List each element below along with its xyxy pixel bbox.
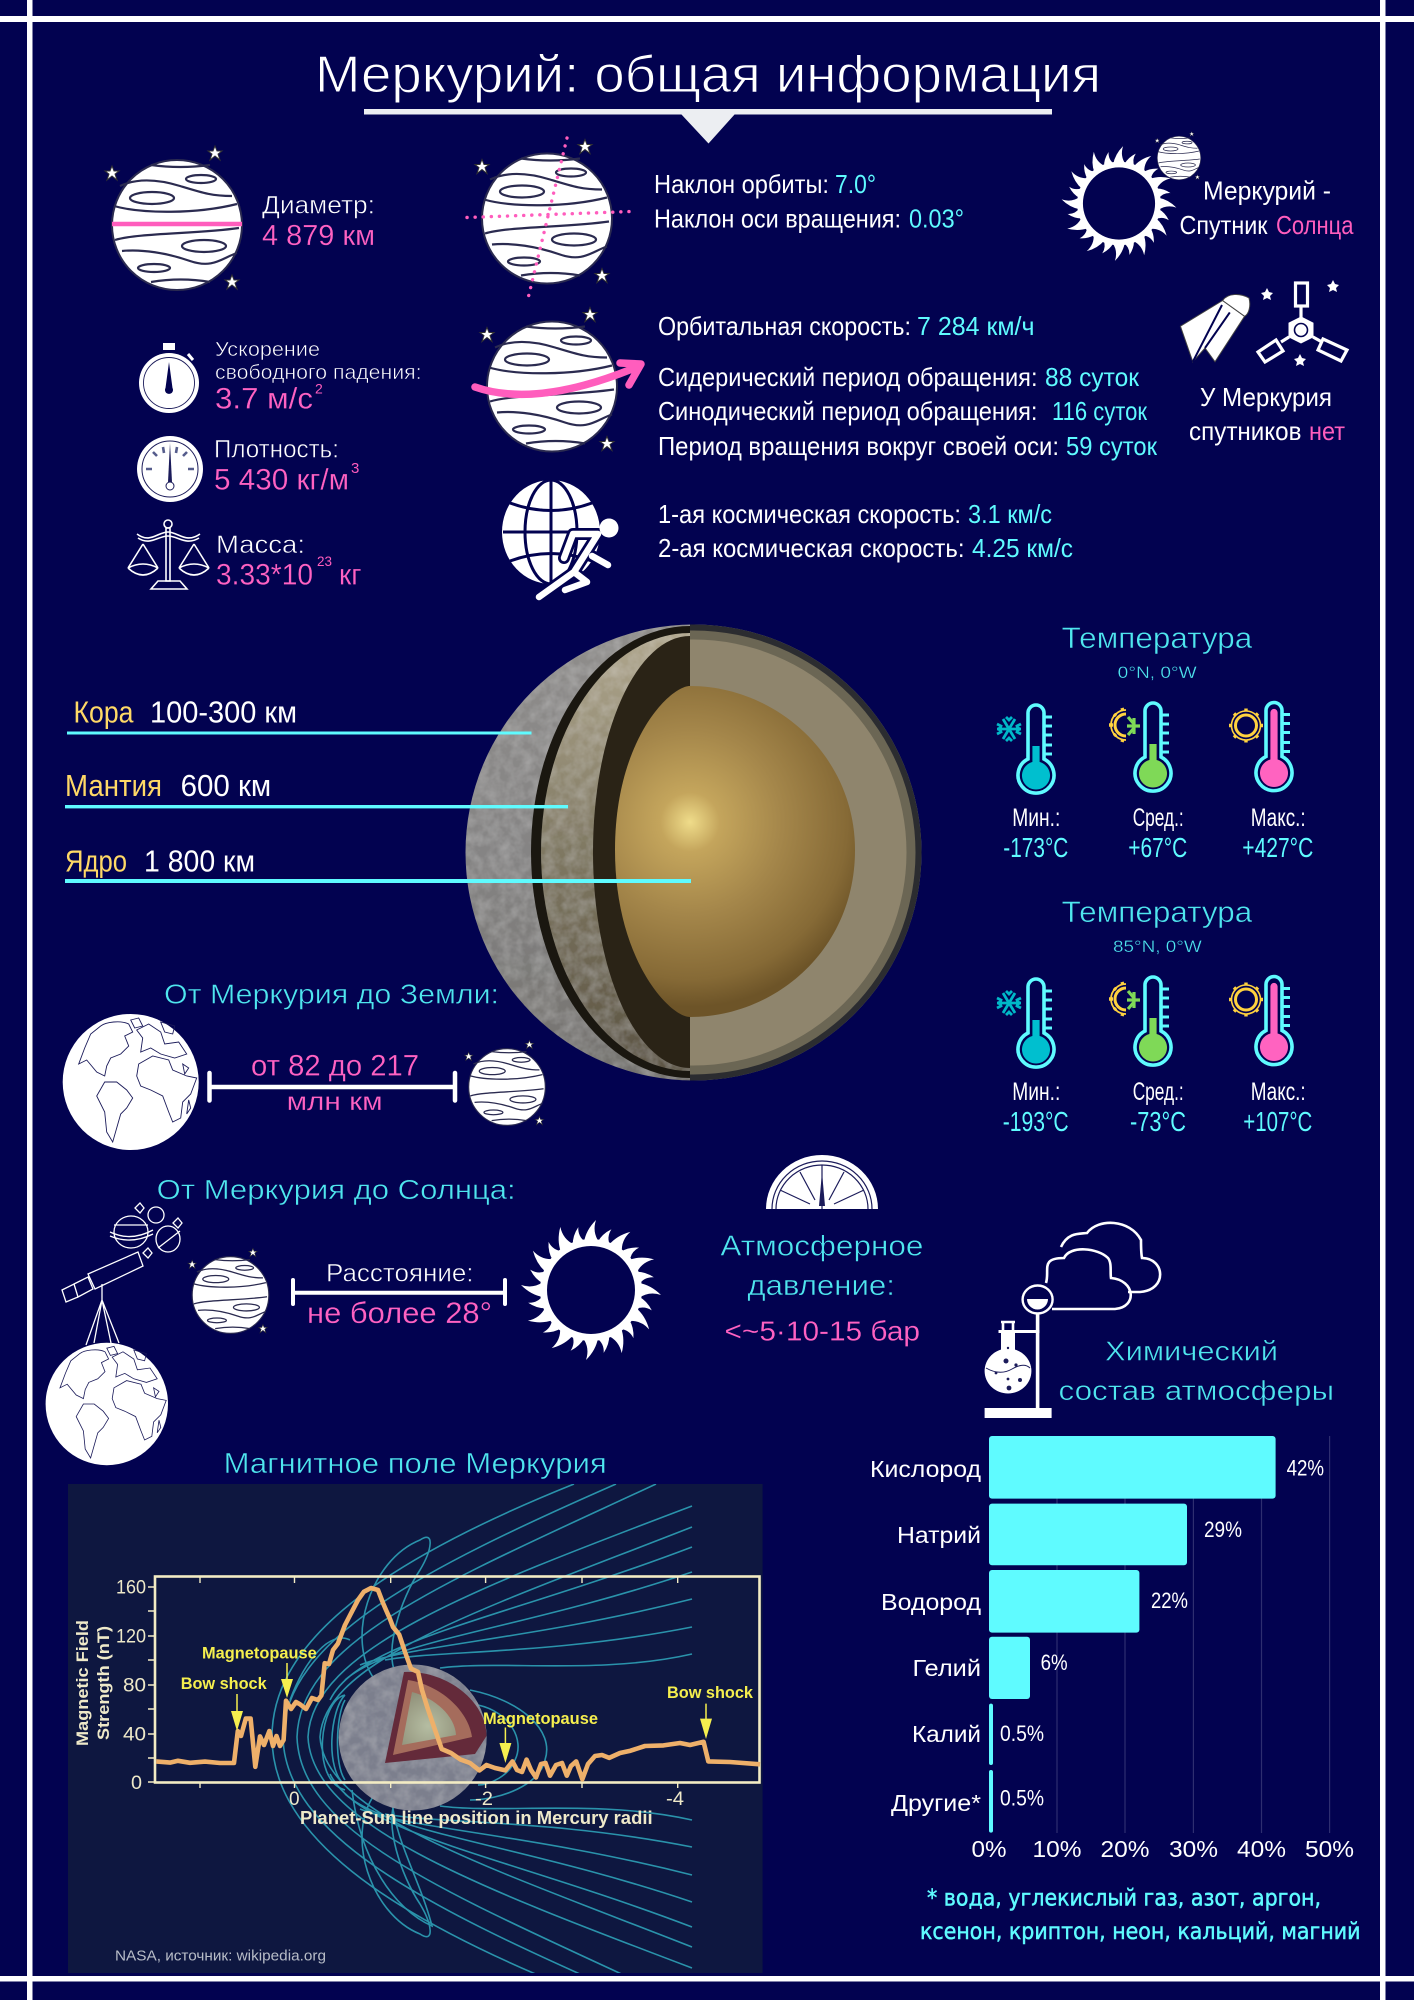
icon: telescope with planets bbox=[62, 1203, 182, 1345]
panel: temperature at equator: Мин.: bbox=[1012, 804, 1060, 832]
axis labels: 0% bbox=[972, 1836, 1006, 1862]
panel: orbital periods bbox=[475, 308, 1158, 461]
panel: orbital periods: 59 суток bbox=[1066, 431, 1158, 461]
thermometer: mean bbox=[1109, 703, 1171, 791]
icon: planet with rotation arrow bbox=[475, 308, 641, 452]
panel: distance to Earth: млн км bbox=[287, 1086, 383, 1116]
thermometer: min bbox=[997, 979, 1054, 1067]
panel: cosmic velocities: 1-ая космическая скорость: bbox=[658, 499, 961, 529]
panel: inclination bbox=[467, 138, 964, 298]
panel: cosmic velocities: 3.1 км/с bbox=[968, 499, 1052, 529]
annotations: Bow shock bbox=[667, 1683, 754, 1702]
panel: inclination: 7.0° bbox=[835, 169, 876, 199]
bar: oxygen: 42% bbox=[1287, 1456, 1324, 1480]
bar chart bbox=[870, 1436, 1354, 1862]
panel: atmospheric pressure: Атмосферное bbox=[720, 1231, 923, 1263]
layer: core bbox=[65, 844, 691, 883]
panel: atmosphere composition: Химический bbox=[1105, 1336, 1278, 1367]
footnote: ксенон, криптон, неон, кальций, магний bbox=[920, 1919, 1360, 1945]
panel: mass: кг bbox=[339, 558, 362, 592]
panel: temperature at equator: +67°C bbox=[1128, 832, 1187, 863]
panel: mass: 23 bbox=[317, 553, 332, 569]
icon: sun bbox=[1060, 144, 1178, 263]
axis labels: 50% bbox=[1305, 1836, 1354, 1862]
chart frame: 80 bbox=[123, 1676, 146, 1696]
panel: atmospheric pressure bbox=[720, 1155, 923, 1346]
panel: temperature at equator: Сред.: bbox=[1133, 804, 1184, 832]
panel: gravity: 2 bbox=[315, 380, 323, 396]
bar: potassium: 0.5% bbox=[1000, 1721, 1044, 1746]
bar: oxygen bbox=[870, 1436, 1324, 1499]
panel: distance to Sun: Расстояние: bbox=[326, 1260, 474, 1288]
annotations: Bow shock bbox=[181, 1674, 267, 1693]
icon: planet bbox=[188, 1248, 269, 1333]
panel: no moons: У Меркурия bbox=[1200, 382, 1332, 412]
icon: stopwatch bbox=[139, 343, 199, 413]
icon: scales bbox=[128, 520, 209, 589]
layer: core: Ядро bbox=[65, 844, 127, 879]
bar: hydrogen: 22% bbox=[1151, 1588, 1188, 1613]
panel: distance to Earth: от 82 до 217 bbox=[251, 1050, 419, 1083]
bar: other bbox=[891, 1770, 1044, 1833]
bar: hydrogen bbox=[881, 1570, 1188, 1633]
panel: temperature at equator bbox=[997, 622, 1313, 863]
diameter value: 4 879 км bbox=[262, 220, 375, 252]
panel: mass bbox=[128, 520, 362, 592]
panel: inclination: 0.03° bbox=[909, 204, 964, 234]
panel: gravity: 3.7 м/с bbox=[215, 382, 313, 416]
panel: mass: 3.33*10 bbox=[216, 558, 313, 592]
chart frame: Magnetic Field bbox=[73, 1620, 92, 1746]
data line bbox=[156, 1588, 760, 1779]
panel: orbital periods: 88 суток bbox=[1045, 362, 1140, 392]
annotations: Magnetopause bbox=[202, 1644, 317, 1663]
credit: NASA, источник: wikipedia.org bbox=[115, 1948, 326, 1965]
panel: temperature at pole: Температура bbox=[1062, 896, 1253, 929]
panel: inclination: Наклон оси вращения: bbox=[654, 204, 901, 234]
bar: potassium bbox=[912, 1704, 1044, 1765]
axis labels bbox=[972, 1836, 1354, 1862]
panel: magnetic field bbox=[68, 1448, 763, 1990]
panel: atmospheric pressure: давление: bbox=[747, 1270, 895, 1302]
panel: density: 5 430 кг/м bbox=[214, 464, 349, 496]
illustration: Mercury cutaway bbox=[466, 624, 922, 1080]
panel: distance to Earth: От Меркурия до Земли: bbox=[164, 979, 499, 1010]
layer: crust: Кора bbox=[74, 694, 134, 730]
panel: orbital periods: Сидерический период обращения: bbox=[658, 362, 1038, 392]
panel: satellite of the Sun: Меркурий - bbox=[1203, 176, 1331, 206]
panel: orbital periods: 116 суток bbox=[1052, 396, 1148, 426]
panel: cosmic velocities: 2-ая космическая скорость: bbox=[658, 533, 964, 563]
footnote: * вода, углекислый газ, азот, аргон, bbox=[927, 1886, 1321, 1912]
thermometer: max bbox=[1229, 702, 1292, 791]
panel: distance to Sun: не более 28° bbox=[307, 1297, 492, 1330]
bar: oxygen: Кислород bbox=[870, 1456, 982, 1482]
panel: orbital periods: 7 284 км/ч bbox=[917, 311, 1034, 341]
panel: distance to Earth bbox=[63, 979, 545, 1150]
panel: mass: Масса: bbox=[216, 531, 305, 559]
panel: temperature at pole: 85°N, 0°W bbox=[1113, 937, 1202, 956]
panel: temperature at pole: Мин.: bbox=[1012, 1078, 1060, 1106]
panel: distance to Sun bbox=[46, 1174, 663, 1465]
bar: helium: Гелий bbox=[912, 1655, 981, 1681]
panel: inclination: Наклон орбиты: bbox=[654, 169, 829, 199]
panel: interior layers bbox=[65, 694, 691, 883]
axis labels: 30% bbox=[1169, 1836, 1218, 1862]
panel: satellite of the Sun: Спутник bbox=[1180, 210, 1268, 240]
chart frame: 160 bbox=[116, 1578, 146, 1598]
panel: temperature at pole: -193°C bbox=[1003, 1106, 1069, 1137]
bar: helium: 6% bbox=[1041, 1650, 1068, 1675]
bar: potassium: Калий bbox=[912, 1721, 981, 1747]
bar: helium bbox=[912, 1637, 1068, 1699]
chart frame bbox=[73, 1576, 760, 1828]
bar: sodium: 29% bbox=[1204, 1517, 1242, 1542]
panel: no moons: спутников bbox=[1189, 416, 1302, 446]
thermometer: max bbox=[1229, 976, 1292, 1065]
panel: temperature at equator: Температура bbox=[1062, 622, 1253, 655]
annotations bbox=[181, 1644, 754, 1763]
icon: rocket bbox=[1180, 295, 1250, 362]
icon: pressure gauge bbox=[766, 1155, 878, 1209]
panel: gravity: Ускорение bbox=[215, 339, 320, 361]
layer: core: 1 800 км bbox=[144, 844, 255, 879]
panel: gravity bbox=[139, 339, 422, 416]
distance bar bbox=[293, 1280, 505, 1304]
thermometer: min bbox=[997, 705, 1054, 793]
panel: temperature at equator: -173°C bbox=[1003, 832, 1068, 863]
title: Меркурий: общая информация bbox=[315, 46, 1101, 104]
thermometer: mean bbox=[1109, 977, 1171, 1065]
panel: density bbox=[137, 436, 359, 502]
panel: orbital periods: Орбитальная скорость: bbox=[658, 311, 911, 341]
magnetic field diagram bbox=[68, 1484, 763, 1990]
bar: sodium: Натрий bbox=[897, 1522, 981, 1548]
chart frame: 0 bbox=[289, 1789, 300, 1810]
layer: crust bbox=[67, 694, 532, 734]
panel: density: Плотность: bbox=[214, 436, 339, 464]
panel: temperature at pole: +107°C bbox=[1243, 1106, 1312, 1137]
panel: no moons: нет bbox=[1309, 416, 1345, 446]
panel: atmospheric pressure: <~5·10-15 бар bbox=[724, 1316, 920, 1346]
axis labels: 40% bbox=[1237, 1836, 1286, 1862]
panel: orbital periods: Период вращения вокруг своей оси: bbox=[658, 431, 1059, 461]
bar: sodium bbox=[897, 1504, 1242, 1565]
layer: mantle bbox=[65, 768, 568, 808]
icon: planet with axes bbox=[467, 138, 631, 298]
chart frame: 0 bbox=[131, 1773, 142, 1794]
panel: temperature at equator: Макс.: bbox=[1251, 804, 1306, 832]
panel: cosmic velocities bbox=[502, 480, 1073, 597]
layer: mantle: Мантия bbox=[65, 768, 162, 803]
annotations: Magnetopause bbox=[483, 1709, 598, 1728]
chart frame: 120 bbox=[116, 1626, 146, 1648]
chart frame: Planet-Sun line position in Mercury radii bbox=[300, 1808, 653, 1828]
icon: Earth bbox=[63, 1014, 199, 1150]
panel: atmosphere composition bbox=[870, 1223, 1360, 1945]
panel: temperature at pole: -73°C bbox=[1130, 1106, 1186, 1137]
panel: no moons bbox=[1180, 280, 1347, 446]
panel: temperature at pole bbox=[997, 896, 1312, 1137]
chart frame: -2 bbox=[475, 1789, 493, 1810]
bar: other: Другие* bbox=[891, 1790, 981, 1816]
panel: density: 3 bbox=[351, 460, 359, 477]
bar: hydrogen: Водород bbox=[881, 1589, 982, 1615]
panel: temperature at equator: 0°N, 0°W bbox=[1118, 663, 1197, 682]
title bbox=[315, 46, 1101, 144]
icon: globe with runner bbox=[502, 480, 618, 597]
chart frame: -4 bbox=[666, 1789, 684, 1810]
icon: planet with diameter line bbox=[105, 146, 242, 290]
footnote bbox=[920, 1886, 1360, 1945]
panel: satellite of the Sun: Солнца bbox=[1276, 210, 1354, 240]
panel: diameter bbox=[105, 146, 375, 290]
axis labels: 10% bbox=[1032, 1836, 1082, 1862]
panel: satellite of the Sun bbox=[1060, 132, 1354, 263]
panel: temperature at pole: Сред.: bbox=[1133, 1078, 1184, 1106]
panel: atmosphere composition: состав атмосферы bbox=[1058, 1375, 1334, 1406]
icon: planet bbox=[465, 1040, 545, 1125]
panel: distance to Sun: От Меркурия до Солнца: bbox=[157, 1174, 516, 1205]
illustration: planet cutaway bbox=[339, 1664, 487, 1810]
layer: crust: 100-300 км bbox=[150, 694, 297, 730]
panel: orbital periods: Синодический период обращения: bbox=[658, 396, 1038, 426]
axis labels: 20% bbox=[1100, 1836, 1150, 1862]
panel: temperature at pole: Макс.: bbox=[1251, 1078, 1306, 1106]
distance bar bbox=[210, 1073, 455, 1100]
bar: other: 0.5% bbox=[1000, 1786, 1044, 1811]
panel: temperature at equator: +427°C bbox=[1242, 832, 1313, 863]
panel: gravity: свободного падения: bbox=[215, 362, 422, 384]
panel: magnetic field: Магнитное поле Меркурия bbox=[224, 1448, 607, 1480]
diameter label: Диаметр: bbox=[262, 192, 375, 220]
icon: satellite bbox=[1258, 280, 1347, 366]
layer: mantle: 600 км bbox=[181, 768, 271, 803]
panel: cosmic velocities: 4.25 км/с bbox=[972, 533, 1073, 563]
icon: gauge bbox=[137, 436, 203, 502]
icon: small planet bbox=[1155, 132, 1201, 180]
chart frame: 40 bbox=[123, 1724, 146, 1746]
icon: flask and clouds bbox=[985, 1223, 1160, 1418]
chart frame: Strength (nT) bbox=[94, 1626, 113, 1740]
icon: sun bbox=[519, 1218, 663, 1362]
icon: Earth bbox=[46, 1343, 168, 1465]
